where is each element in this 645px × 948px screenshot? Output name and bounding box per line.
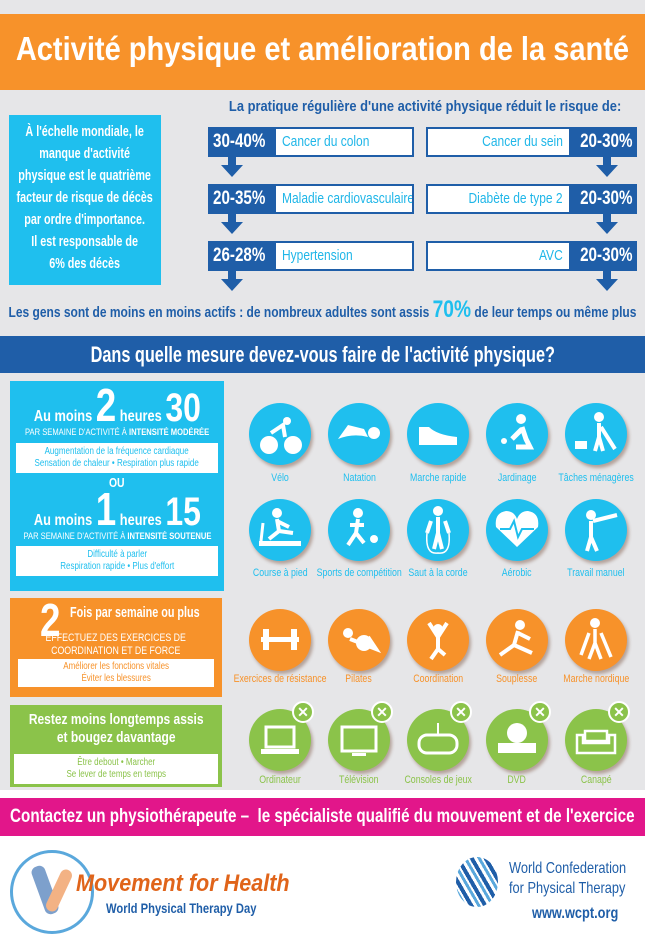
panel: global statistic: manque d'activité [40, 145, 130, 162]
panel: global statistic [9, 115, 161, 285]
icon grid: Marche rapide [410, 472, 466, 484]
panel: aerobic: Augmentation de la fréquence cardiaque [45, 446, 189, 457]
panel: strength: Éviter les blessures [81, 673, 151, 684]
panel: sit less: Être debout • Marcher [77, 757, 155, 768]
risk boxes: 20-30% [580, 245, 632, 266]
contact banner: Contactez un physiothérapeute – le spécialiste qualifié du mouvement et de l'exercice [10, 806, 635, 827]
icon grid: DVD [508, 774, 526, 786]
panel: global statistic: 6% des décès [50, 255, 120, 272]
panel: aerobic: Difficulté à parler [87, 549, 147, 560]
panel: aerobic: PAR SEMAINE D'ACTIVITÉ À INTENSITÉ SOUTENUE [23, 531, 211, 542]
icon grid: ✕ [376, 704, 388, 720]
icon grid: Saut à la corde [408, 567, 468, 579]
logo: Movement for Health [10, 850, 290, 934]
panel: global statistic: Il est responsable de [32, 233, 138, 250]
icon grid: Sports de compétition [316, 567, 402, 579]
icon grid: Ordinateur [259, 774, 301, 786]
icon grid: Aérobic [502, 567, 532, 579]
panel: global statistic: À l'échelle mondiale, le [26, 123, 144, 140]
panel: global statistic: par ordre d'importance. [25, 211, 145, 228]
icon grid: Tâches ménagères [558, 472, 634, 484]
title: Activité physique et amélioration de la santé [16, 30, 629, 67]
logo: Movement for Health: World Physical Therapy Day [106, 900, 256, 916]
icon grid: Exercices de résistance [234, 673, 326, 685]
panel: global statistic: physique est le quatrième [19, 167, 151, 184]
section heading [0, 336, 645, 373]
section heading: Dans quelle mesure devez-vous faire de l'activité physique? [90, 342, 555, 367]
panel: strength [10, 598, 222, 697]
logo: WCPT: www.wcpt.org [532, 905, 618, 922]
panel: aerobic: Sensation de chaleur • Respiration plus rapide [35, 458, 199, 469]
risk boxes: AVC [539, 247, 563, 264]
panel: strength: Fois par semaine ou plus [70, 604, 200, 621]
icon grid: ✕ [455, 704, 467, 720]
panel: strength: 2 [40, 594, 60, 646]
icon grid: Coordination [413, 673, 463, 685]
risk boxes: Cancer du colon [282, 133, 369, 150]
icon grid [234, 403, 634, 786]
icon grid: Jardinage [498, 472, 536, 484]
icons row 4 [249, 709, 311, 771]
icon grid: Travail manuel [567, 567, 625, 579]
risk boxes [208, 127, 637, 291]
risk boxes: Diabète de type 2 [469, 190, 563, 207]
icon grid: Consoles de jeux [404, 774, 472, 786]
logo: WCPT [456, 857, 626, 922]
icon grid: Télévision [339, 774, 379, 786]
icon grid: ✕ [613, 704, 625, 720]
icons row 2 [249, 499, 311, 561]
panel: sit less: et bougez davantage [57, 729, 175, 746]
logo: Movement for Health: Movement for Health [76, 870, 290, 897]
risk boxes: 30-40% [213, 131, 265, 152]
sedentary statement: Les gens sont de moins en moins actifs : de nombreux adultes sont assis 70% de leur temps ou même plus [9, 296, 636, 323]
panel: aerobic [10, 381, 224, 591]
panel: sit less [10, 705, 222, 787]
panel: aerobic: Au moins 2 heures 30 [33, 379, 201, 431]
risk boxes: 26-28% [213, 245, 265, 266]
icon grid: ✕ [534, 704, 546, 720]
risk boxes: Hypertension [282, 247, 353, 264]
icons row 1 [249, 403, 311, 465]
logo: WCPT: for Physical Therapy [509, 880, 625, 897]
icon grid: Souplesse [496, 673, 538, 685]
title [0, 14, 645, 90]
icon grid: Natation [343, 472, 375, 484]
logo: WCPT: World Confederation [509, 860, 626, 877]
panel: sit less: Se lever de temps en temps [66, 769, 166, 780]
risk header: La pratique régulière d'une activité physique réduit le risque de: [229, 98, 621, 115]
risk boxes: 20-30% [580, 188, 632, 209]
panel: global statistic: facteur de risque de décès [17, 189, 153, 206]
panel: aerobic: PAR SEMAINE D'ACTIVITÉ À INTENSITÉ MODÉRÉE [25, 427, 209, 438]
panel: aerobic: Respiration rapide • Plus d'effort [60, 561, 174, 572]
icons row 3 [249, 609, 311, 671]
icon grid: ✕ [297, 704, 309, 720]
panel: aerobic: OU [109, 475, 125, 490]
panel: sit less: Restez moins longtemps assis [29, 711, 203, 728]
risk boxes: 20-30% [580, 131, 632, 152]
risk boxes: Maladie cardiovasculaire [282, 190, 412, 207]
panel: strength: Améliorer les fonctions vitales [63, 661, 169, 672]
risk boxes: Cancer du sein [482, 133, 563, 150]
icon grid: Marche nordique [563, 673, 629, 685]
icon grid: Course à pied [253, 567, 307, 579]
panel: aerobic: Au moins 1 heures 15 [33, 483, 201, 535]
risk boxes: 20-35% [213, 188, 265, 209]
icon grid: Canapé [581, 774, 611, 786]
contact banner [0, 798, 645, 836]
panel: strength: COORDINATION ET DE FORCE [51, 645, 181, 657]
panel: strength: EFFECTUEZ DES EXERCICES DE [46, 632, 186, 644]
icon grid: Vélo [271, 472, 289, 484]
icon grid: Pilates [346, 673, 372, 685]
